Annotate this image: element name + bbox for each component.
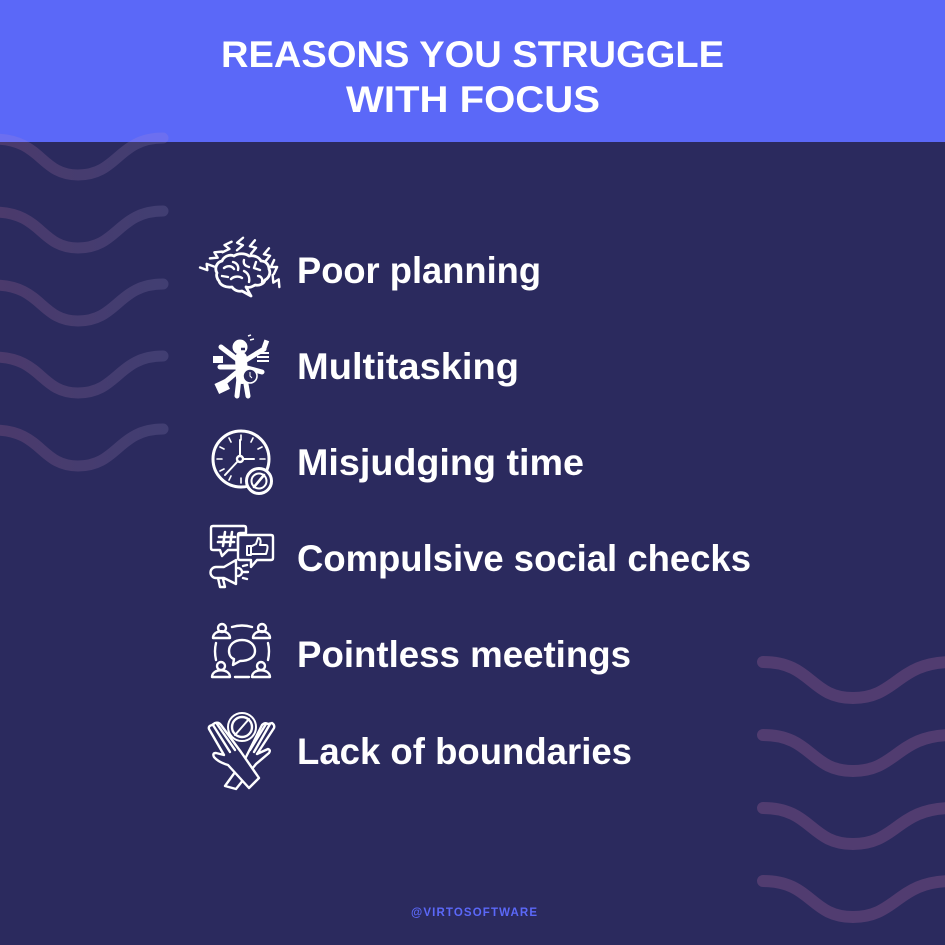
title: WITH FOCUS [346, 79, 600, 120]
title [221, 34, 724, 120]
icon: clock with prohibition sign [213, 431, 272, 494]
icon: multitasking figure [213, 335, 269, 396]
item: Pointless meetings: Pointless meetings [297, 634, 631, 675]
icon: crossed hands with prohibition sign [209, 713, 274, 789]
icon: social media bubbles and megaphone [210, 526, 273, 587]
header band [0, 0, 945, 142]
title: REASONS YOU STRUGGLE [221, 34, 724, 75]
decorative waves: right [763, 662, 945, 917]
footer handle: @VIRTOSOFTWARE [411, 907, 537, 919]
item: Compulsive social checks: Compulsive social checks [297, 538, 751, 579]
decorative waves: left [0, 138, 163, 466]
icon: brain with lightning [200, 237, 283, 296]
item: Poor planning: Poor planning [297, 250, 541, 291]
item: Lack of boundaries: Lack of boundaries [297, 731, 632, 772]
item: Multitasking: Multitasking [297, 346, 519, 387]
icon: meeting people around speech bubble [212, 624, 270, 677]
wave overlap on header [0, 132, 168, 142]
item: Misjudging time: Misjudging time [297, 442, 584, 483]
